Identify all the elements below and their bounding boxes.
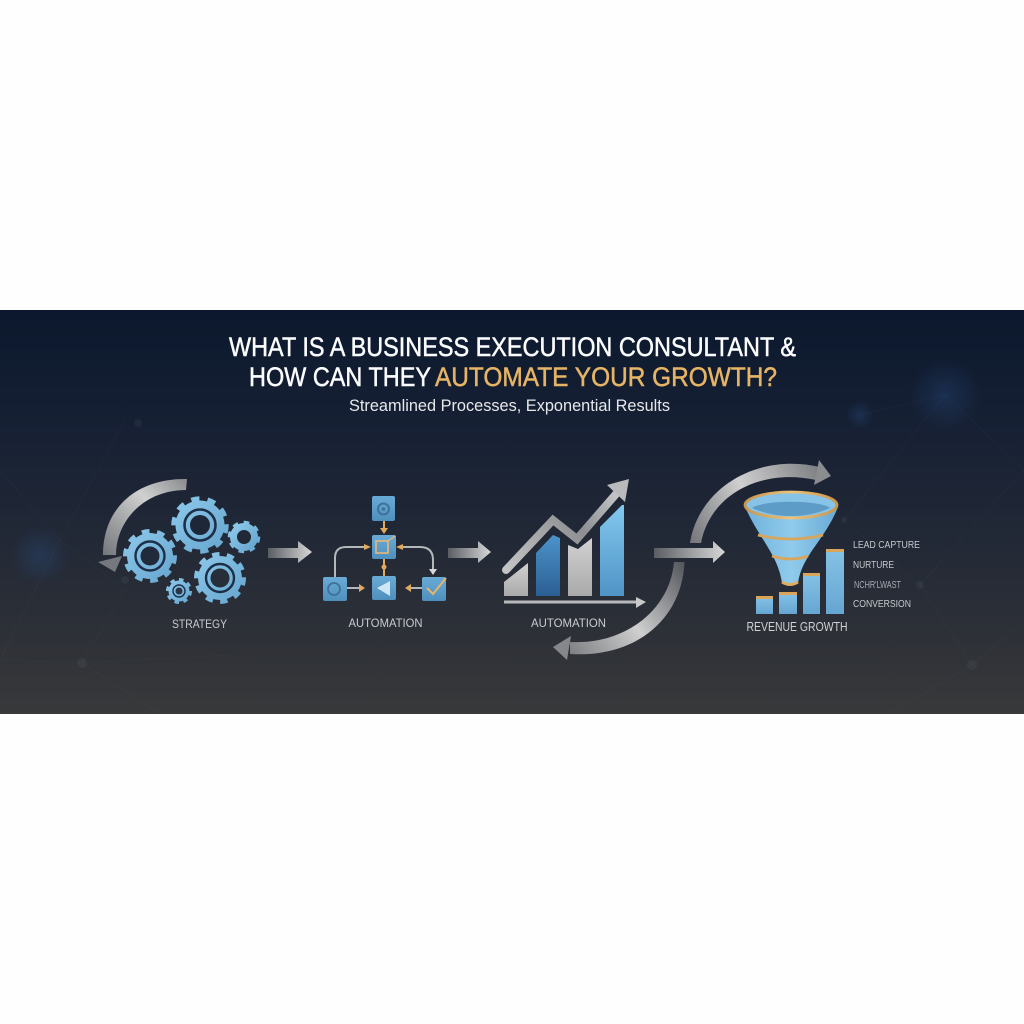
- gear large left: [126, 532, 174, 580]
- funnel stage labels: [853, 540, 920, 610]
- background band: [0, 310, 1024, 714]
- box top: [372, 496, 395, 521]
- arrow: upper curved: [690, 460, 831, 543]
- curved arrow around gears: [98, 479, 187, 572]
- icon: automation flow diagram: [323, 496, 446, 601]
- arrow: automation to chart: [448, 541, 491, 563]
- box right: [422, 577, 446, 601]
- box left: [323, 577, 347, 601]
- icon: strategy gears: [98, 479, 258, 602]
- title: AUTOMATE YOUR GROWTH?: [435, 362, 777, 392]
- gear tiny: [168, 580, 190, 602]
- arrow: strategy to automation: [268, 541, 312, 563]
- bars: [504, 563, 528, 596]
- label: automation 2: AUTOMATION: [531, 616, 606, 630]
- decorative network background: [0, 359, 1024, 714]
- icon: growth bar chart: [504, 479, 646, 608]
- arrow: chart to funnel: [654, 541, 725, 563]
- funnel stage labels: NCHR'LWAST: [854, 580, 901, 591]
- subtitle: Streamlined Processes, Exponential Results: [349, 396, 670, 415]
- icon: funnel: [745, 492, 838, 585]
- label: automation 1: AUTOMATION: [348, 616, 422, 630]
- trend arrow: [506, 479, 629, 570]
- x axis: [504, 597, 646, 608]
- label: revenue growth: REVENUE GROWTH: [746, 620, 848, 634]
- funnel stage labels: NURTURE: [853, 560, 894, 571]
- connectors: [335, 547, 433, 588]
- arrow: lower curved return: [553, 562, 684, 660]
- label: strategy: STRATEGY: [172, 617, 227, 631]
- title: WHAT IS A BUSINESS EXECUTION CONSULTANT &: [229, 332, 796, 362]
- gear small right: [230, 522, 258, 552]
- icon: revenue bars: [756, 549, 844, 614]
- title: [229, 332, 796, 392]
- gear large top: [174, 499, 226, 551]
- funnel stage labels: LEAD CAPTURE: [853, 540, 920, 551]
- box middle: [372, 535, 396, 559]
- title: HOW CAN THEY: [249, 362, 431, 392]
- box bottom: [372, 576, 396, 600]
- funnel stage labels: CONVERSION: [853, 599, 911, 610]
- gear large bottom: [196, 554, 244, 602]
